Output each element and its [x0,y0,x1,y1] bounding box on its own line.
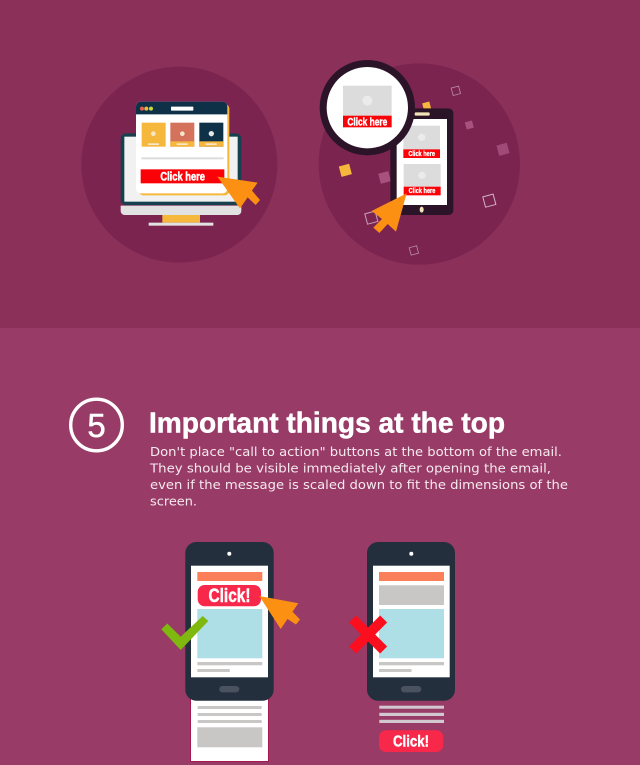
text lines below phone [379,706,444,723]
icon: cursor arrow [372,193,407,233]
image tile 2 [170,123,194,147]
icon: green check [161,616,208,650]
icon: cursor arrow [259,596,300,629]
bad example: phone with button at bottom [353,542,455,752]
button: click [379,730,443,752]
icon: red cross [353,619,384,650]
illustration: desktop monitor with email [81,67,277,263]
panel: bottom section background [0,328,640,765]
email window [136,102,229,195]
phone body [367,542,455,701]
number badge: 5: 5 [87,407,106,444]
icon: cursor arrow [217,177,260,208]
phone body [185,542,274,701]
icon: magnifier: Click here [347,117,387,129]
icon: magnifier [320,60,415,155]
body text: even if the message is scaled down to fit the dimensions of the [150,477,568,492]
phone tile 2: Click here [409,188,435,195]
image tile 3 [199,123,223,147]
icon: smartphone [390,108,453,215]
button: click: Click! [208,586,250,607]
button: click: Click! [393,734,429,750]
body text [149,444,568,508]
body text: They should be visible immediately after opening the email, [149,461,551,476]
illustration: phone with magnifier [319,60,520,265]
body text: screen. [150,493,197,508]
confetti squares [339,86,510,255]
button: click here: Click here [160,170,205,184]
icon: monitor [121,133,241,226]
heading: Important things at the top [149,408,505,440]
panel: top section background [0,0,640,328]
phone tile 1: Click here [408,151,435,158]
number badge: 5 [71,399,122,451]
email continuation below phone [190,695,268,762]
body text: Don't place "call to action" buttons at the bottom of the email. [150,444,562,459]
good example: phone with button at top [161,542,300,762]
image tile 1 [142,123,166,147]
